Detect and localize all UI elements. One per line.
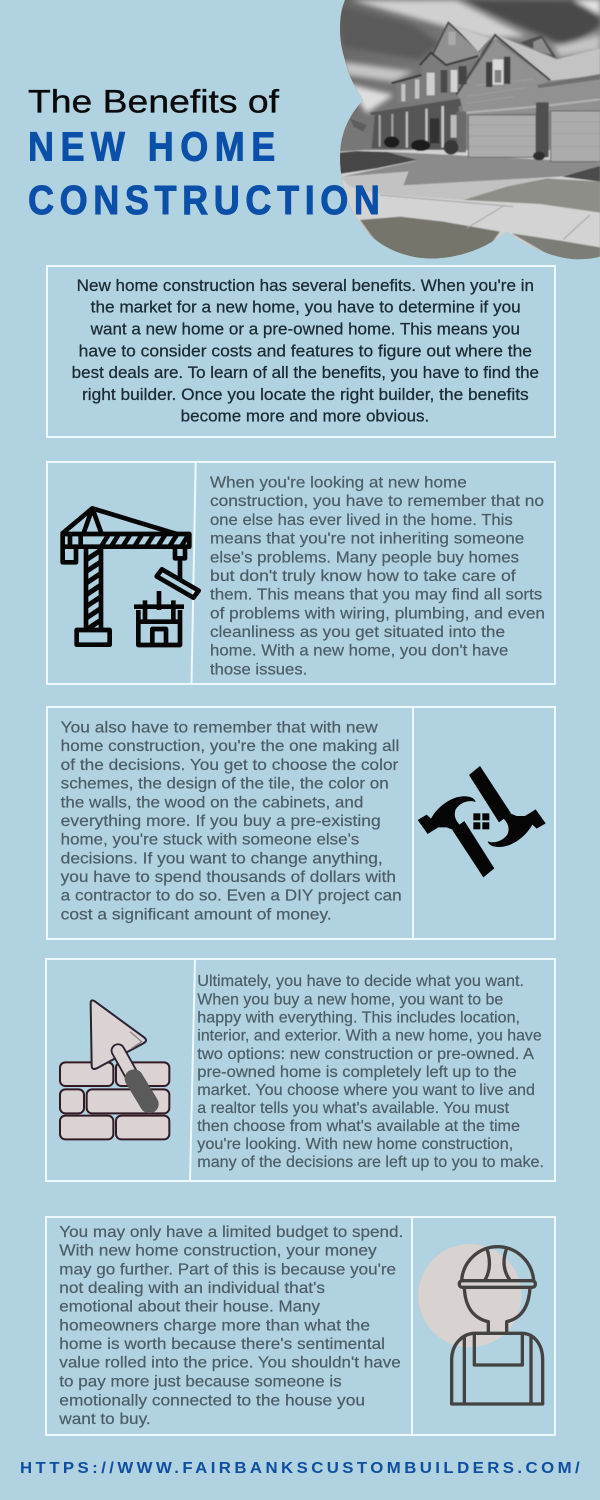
icon: tower crane: [62, 508, 199, 645]
panel text: [58, 1224, 403, 1428]
footer website link: HTTPS://WWW.FAIRBANKSCUSTOMBUILDERS.COM/: [20, 1459, 580, 1477]
panel text: them. This means that you may find all sorts: [210, 587, 542, 604]
panel text: home construction, you're the one making all: [61, 738, 399, 755]
intro text: the market for a new home, you have to determine if you: [91, 299, 521, 317]
garage doors and stone column: [468, 115, 536, 157]
photo: suburban house in cloud-shaped mask: [333, 0, 600, 267]
panel text: may go further. Part of this is because you're: [59, 1261, 396, 1278]
right roof: [497, 35, 600, 81]
panel text: interior, and exterior. With a new home, you have: [197, 1028, 542, 1045]
intro text: best deals are. To learn of all the benefits, you have to find the: [72, 364, 539, 382]
icon: construction worker: [418, 1244, 543, 1404]
panel text: [210, 474, 545, 678]
panel text: emotionally connected to the house you: [59, 1392, 365, 1409]
panel text: many of the decisions are left up to you to make.: [197, 1154, 544, 1171]
upper gable: [433, 23, 482, 67]
panel text: You may only have a limited budget to spend.: [59, 1224, 403, 1241]
panel text: a realtor tells you what's available. You must: [197, 1100, 510, 1117]
panel text: market. You choose where you want to live and: [197, 1082, 535, 1099]
panel text: to pay more just because someone is: [59, 1373, 342, 1390]
intro text: right builder. Once you locate the right builder, the benefits: [82, 386, 529, 404]
panel text: schemes, the design of the tile, the color on: [61, 776, 389, 793]
panel text: want to buy.: [58, 1411, 151, 1428]
panel text: When you buy a new home, you want to be: [197, 991, 503, 1008]
title line: NEW HOME: NEW HOME: [28, 124, 275, 170]
shrubs: [384, 136, 399, 148]
intro text: want a new home or a pre-owned home. This means you: [90, 321, 520, 339]
intro text: New home construction has several benefits. When you're in: [77, 277, 534, 295]
panel text: those issues.: [210, 661, 307, 678]
panel text: value rolled into the price. You shouldn't have: [59, 1355, 401, 1372]
ground: [340, 149, 600, 253]
panel text: the walls, the wood on the cabinets, and: [61, 794, 363, 811]
panel text: You also have to remember that with new: [61, 719, 378, 736]
title line: CONSTRUCTION: CONSTRUCTION: [28, 178, 380, 224]
panel text: else's problems. Many people buy homes: [210, 549, 519, 566]
left distant houses: [340, 117, 365, 152]
panel text: [61, 719, 402, 923]
panel text: When you're looking at new home: [210, 474, 467, 491]
panel text: not dealing with an individual that's: [59, 1280, 325, 1297]
panel: introduction: [47, 266, 555, 437]
panel text: [197, 973, 544, 1171]
panel text: you have to spend thousands of dollars with: [61, 869, 396, 886]
panel text: of problems with wiring, plumbing, and even: [210, 605, 545, 622]
panel text: cleanliness as you get situated into the: [210, 624, 505, 641]
panel: decide what you want: [46, 959, 555, 1181]
intro text: have to consider costs and features to figure out where the: [79, 342, 532, 360]
second storey left: [400, 54, 474, 98]
panel text: emotional about their house. Many: [59, 1299, 320, 1316]
panel text: home is worth because there's sentimental: [59, 1336, 385, 1353]
icon: crossed hammers with house window: [418, 766, 546, 877]
panel text: you're looking. With new home construction,: [197, 1136, 513, 1153]
panel text: homeowners charge more than what the: [59, 1317, 370, 1334]
panel text: With new home construction, your money: [59, 1243, 377, 1260]
panel: no previous owner: [47, 462, 555, 684]
panel text: one else has ever lived in the home. This: [210, 512, 513, 529]
panel text: pre-owned home is completely left up to the: [197, 1064, 517, 1081]
upper window and shutters: [486, 62, 492, 87]
panel text: two options: new construction or pre-owned. A: [197, 1046, 534, 1063]
title: [28, 84, 380, 224]
panel text: then choose from what's available at the time: [197, 1118, 520, 1135]
icon: trowel and bricks: [60, 1000, 169, 1139]
panel text: but don't truly know how to take care of: [210, 568, 516, 585]
panel text: everything more. If you buy a pre-existing: [61, 813, 381, 830]
intro text: [72, 277, 539, 426]
panel text: of the decisions. You get to choose the color: [61, 757, 399, 774]
title line: The Benefits of: The Benefits of: [28, 84, 279, 120]
panel text: construction, you have to remember that no: [210, 493, 544, 510]
intro text: become more and more obvious.: [181, 408, 429, 426]
panel text: a contractor to do so. Even a DIY project can: [61, 888, 402, 905]
panel text: home. With a new home, you don't have: [210, 643, 508, 660]
panel text: decisions. If you want to change anything,: [61, 850, 383, 867]
panel: limited budget: [46, 1217, 555, 1435]
panel text: cost a significant amount of money.: [61, 906, 332, 923]
porch: [370, 99, 462, 115]
panel text: home, you're stuck with someone else's: [61, 832, 359, 849]
panel text: Ultimately, you have to decide what you want.: [197, 973, 524, 990]
panel text: means that you're not inheriting someone: [210, 531, 524, 548]
panel: making the decisions: [47, 707, 555, 939]
main wall: [458, 41, 582, 115]
panel text: happy with everything. This includes location,: [197, 1010, 520, 1026]
